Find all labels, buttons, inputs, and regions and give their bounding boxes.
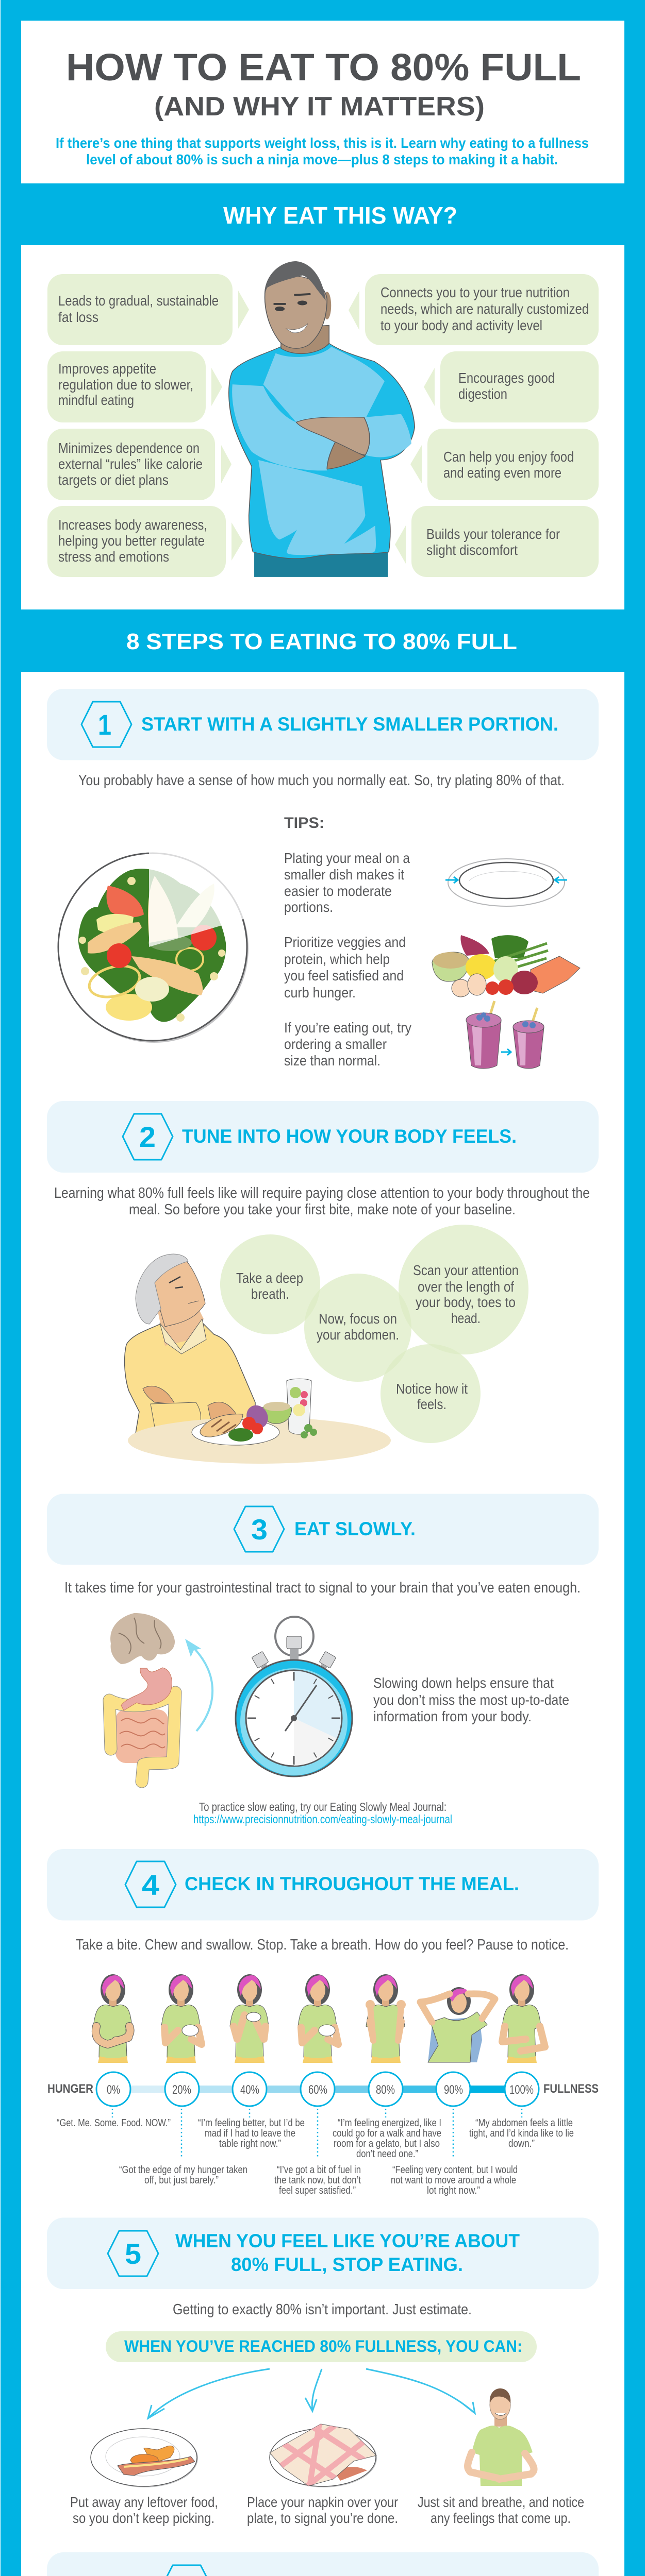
step 3 callout text (373, 1675, 569, 1724)
tip: smaller size: If you’re eating out, try (284, 1020, 411, 1036)
step 3 header: 3 (251, 1513, 268, 1546)
illustration: man with crossed arms (229, 261, 415, 577)
quotes: fullness levels: don’t need one.” (356, 2148, 418, 2160)
tip: smaller dish: smaller dish makes it (284, 867, 404, 883)
journal link: eating slowly (193, 1800, 452, 1826)
hunger fullness scale: 80% (376, 2083, 395, 2097)
thought bubbles: body scan: Take a deep (236, 1270, 303, 1286)
intro text: level of about 80% is such a ninja move—plus 8 steps to making it a habit. (86, 151, 558, 167)
benefit: appetite regulation (47, 351, 222, 422)
benefit: body awareness (47, 506, 243, 577)
quotes: fullness levels: mad if I had to leave the (205, 2128, 295, 2139)
illustration: salad plate with 20 percent faded (58, 849, 249, 1043)
panel: why eat this way (21, 245, 624, 609)
callout: when you have reached 80 percent (106, 2331, 537, 2362)
icon: brain (110, 1613, 175, 1664)
tip: smaller size: size than normal. (284, 1053, 381, 1069)
quotes: fullness levels: “I’m feeling better, but I’d be (198, 2117, 305, 2129)
callout: when you have reached 80 percent: WHEN YOU’VE REACHED 80% FULLNESS, YOU CAN: (124, 2337, 522, 2355)
tip: veggies and protein: you feel satisfied and (284, 968, 404, 984)
thought bubbles: body scan: your body, toes to (416, 1294, 516, 1310)
quotes: fullness levels: down.” (508, 2138, 535, 2149)
benefit: body awareness: helping you better regulate (58, 533, 205, 549)
benefit: appetite regulation: regulation due to slower, (58, 377, 193, 393)
tip: smaller dish: portions. (284, 899, 333, 915)
benefit: appetite regulation: mindful eating (58, 392, 134, 408)
tips heading: TIPS: (284, 815, 324, 832)
benefit: tolerance: Builds your tolerance for (426, 526, 560, 542)
step 6 header (47, 2552, 599, 2576)
tip: veggies and protein (284, 934, 406, 1001)
figure: energized 80 percent (366, 1974, 406, 2063)
icon: stopwatch (236, 1617, 352, 1776)
hunger fullness scale: FULLNESS (543, 2082, 599, 2096)
step 5 header: WHEN YOU FEEL LIKE YOU’RE ABOUT (175, 2230, 520, 2251)
step 4 header (47, 1849, 599, 1921)
title (66, 46, 581, 122)
dotted connector lines (112, 2109, 522, 2157)
benefit: digestion (424, 351, 599, 422)
quotes: fullness levels: room for a gelato, but I also (334, 2138, 440, 2149)
panel: 8 steps content (21, 672, 624, 2576)
intro text (56, 135, 589, 167)
illustration: plate with leftover food (91, 2429, 198, 2487)
benefit: enjoy food (410, 429, 599, 500)
icon: digestive tract (109, 1668, 175, 1782)
tip: smaller dish: Plating your meal on a (284, 850, 410, 866)
quotes: fullness levels: feel super satisfied.” (279, 2185, 356, 2196)
figure: hands on belly 100 percent (502, 1974, 545, 2063)
thought bubbles: body scan (220, 1225, 528, 1443)
step 5 text: Getting to exactly 80% isn’t important. Just estimate. (173, 2301, 472, 2318)
thought bubbles: body scan: over the length of (418, 1279, 514, 1295)
step 1 header: 1 (98, 708, 111, 741)
journal link: eating slowly: To practice slow eating, try our Eating Slowly Meal Journal: (199, 1800, 446, 1814)
benefit: external rules: Minimizes dependence on (58, 440, 200, 456)
step 3 header: EAT SLOWLY. (294, 1518, 416, 1539)
tip: smaller size (284, 1020, 411, 1069)
step 3 header (47, 1494, 599, 1565)
captions: three options: Just sit and breathe, and notice (418, 2494, 584, 2510)
benefit: external rules (47, 429, 231, 500)
illustration: woman at table breathing with meal (125, 1254, 391, 1464)
arrow: gut to brain (185, 1639, 212, 1731)
figure: bowl 60 percent (298, 1974, 338, 2063)
figures: seven fullness poses (93, 1974, 545, 2063)
benefit: body awareness: Increases body awareness, (58, 517, 207, 533)
benefit: fat loss: Leads to gradual, sustainable (58, 293, 219, 309)
tip: smaller dish: easier to moderate (284, 883, 392, 899)
figure: raising spoon 40 percent (230, 1974, 269, 2063)
benefit: enjoy food: and eating even more (443, 465, 561, 481)
thought bubbles: body scan: Scan your attention (413, 1262, 519, 1278)
hunger fullness scale (47, 2072, 599, 2106)
quotes: fullness levels: “Got the edge of my hunger taken (119, 2164, 247, 2176)
benefit: true nutrition needs: Connects you to your true nutrition (381, 284, 570, 300)
step 3 callout text: you don’t miss the most up-to-date (373, 1692, 569, 1708)
step 1 text: You probably have a sense of how much you normally eat. So, try plating 80% of that. (78, 772, 565, 789)
benefit: appetite regulation: Improves appetite (58, 361, 156, 377)
step 2 header: TUNE INTO HOW YOUR BODY FEELS. (182, 1126, 517, 1147)
step 5 header (47, 2217, 599, 2289)
thought bubbles: body scan: your abdomen. (317, 1327, 399, 1343)
tip: veggies and protein: curb hunger. (284, 985, 356, 1001)
hunger fullness scale: 0% (107, 2083, 120, 2097)
thought bubbles: body scan: Notice how it (396, 1381, 468, 1397)
title: HOW TO EAT TO 80% FULL (66, 46, 581, 89)
step 2 header: 2 (139, 1121, 156, 1153)
illustration: man with hands on belly (468, 2388, 534, 2486)
tip: veggies and protein: protein, which help (284, 951, 390, 967)
benefit: fat loss: fat loss (58, 309, 98, 325)
benefit: true nutrition needs (349, 274, 599, 345)
captions: three options (70, 2494, 584, 2526)
benefit: digestion: Encourages good (458, 370, 555, 386)
hunger fullness scale: HUNGER (47, 2082, 93, 2096)
thought bubbles: body scan: head. (451, 1310, 481, 1326)
title: (AND WHY IT MATTERS) (154, 92, 485, 122)
thought bubbles: body scan: Now, focus on (319, 1311, 397, 1327)
captions: three options: Put away any leftover food, (70, 2494, 218, 2510)
step 4 header: 4 (142, 1869, 159, 1901)
step 5 header: 80% FULL, STOP EATING. (231, 2254, 463, 2275)
quotes: fullness levels: “Get. Me. Some. Food. NOW.” (57, 2117, 171, 2129)
quotes: fullness levels: off, but just barely.” (144, 2175, 219, 2186)
quotes: fullness levels: tight, and I’d kinda like to lie (469, 2128, 574, 2139)
tip: smaller dish (284, 850, 410, 915)
benefit: external rules: targets or diet plans (58, 472, 169, 488)
quotes: fullness levels: lot right now.” (427, 2185, 480, 2196)
heading: why eat this way: WHY EAT THIS WAY? (223, 202, 457, 229)
benefit: fat loss (47, 274, 249, 345)
benefit: digestion: digestion (458, 386, 507, 402)
benefit: true nutrition needs: needs, which are naturally customized (381, 301, 589, 317)
hunger fullness scale: 60% (308, 2083, 327, 2097)
quotes: fullness levels: not want to move around a whole (391, 2175, 516, 2186)
icon: smoothies large and small (466, 1001, 544, 1069)
quotes: fullness levels: table right now.” (219, 2138, 281, 2149)
panel: title header (21, 21, 624, 183)
step 3 text: It takes time for your gastrointestinal tract to signal to your brain that you’ve eaten enough. (64, 1580, 581, 1596)
step 1 header (47, 689, 599, 760)
benefit: true nutrition needs: to your body and activity level (381, 317, 542, 333)
tip: smaller size: ordering a smaller (284, 1036, 387, 1052)
benefit: external rules: external “rules” like calorie (58, 456, 203, 472)
figure: arms crossed 0 percent (93, 1974, 132, 2063)
thought bubbles: body scan: feels. (417, 1396, 446, 1412)
quotes: fullness levels: “Feeling very content, but I would (392, 2164, 518, 2176)
heading: 8 steps: 8 STEPS TO EATING TO 80% FULL (126, 629, 517, 654)
quotes: fullness levels: “I’ve got a bit of fuel in (277, 2164, 361, 2176)
illustration: plate covered with napkin (270, 2421, 377, 2488)
hunger fullness scale: 20% (172, 2083, 191, 2097)
step 1 header: START WITH A SLIGHTLY SMALLER PORTION. (141, 714, 558, 735)
quotes: fullness levels (57, 2117, 574, 2196)
hunger fullness scale: 40% (240, 2083, 259, 2097)
step 5 header: 5 (125, 2238, 141, 2270)
icon: small plate (445, 859, 567, 906)
step 2 text: meal. So before you take your first bite, make note of your baseline. (129, 1201, 516, 1218)
captions: three options: Place your napkin over your (247, 2494, 398, 2510)
step 4 text: Take a bite. Chew and swallow. Stop. Take a breath. How do you feel? Pause to notice. (76, 1937, 569, 1953)
benefit: body awareness: stress and emotions (58, 549, 169, 565)
journal link: eating slowly: https://www.precisionnutrition.com/eating-slowly-meal-journal (193, 1812, 452, 1826)
captions: three options: any feelings that come up. (431, 2510, 571, 2526)
tip: veggies and protein: Prioritize veggies and (284, 934, 406, 950)
step 3 callout text: Slowing down helps ensure that (373, 1675, 554, 1691)
captions: three options: plate, to signal you’re done. (247, 2510, 398, 2526)
hunger fullness scale: 90% (444, 2083, 463, 2097)
arrows to three options (148, 2369, 475, 2418)
quotes: fullness levels: “My abdomen feels a little (475, 2117, 573, 2129)
quotes: fullness levels: “I’m feeling energized, like I (338, 2117, 441, 2129)
intro text: If there’s one thing that supports weight loss, this is it. Learn why eating to a fullness (56, 135, 589, 151)
benefit: enjoy food: Can help you enjoy food (443, 449, 574, 465)
step 3 callout text: information from your body. (373, 1708, 532, 1724)
figure: stretching 90 percent (420, 1987, 495, 2062)
captions: three options: so you don’t keep picking. (73, 2510, 214, 2526)
quotes: fullness levels: could go for a walk and have (333, 2128, 441, 2139)
step 4 header: CHECK IN THROUGHOUT THE MEAL. (185, 1873, 519, 1894)
benefit: tolerance (395, 506, 599, 577)
thought bubbles: body scan: breath. (251, 1286, 289, 1302)
quotes: fullness levels: the tank now, but don’t (274, 2175, 361, 2186)
icon: vegetables and protein foods (432, 935, 580, 997)
figure: bowl 20 percent (161, 1974, 202, 2063)
step 2 text (54, 1185, 590, 1218)
hunger fullness scale: 100% (509, 2083, 534, 2097)
step 2 header (47, 1101, 599, 1173)
benefit: tolerance: slight discomfort (426, 542, 518, 558)
